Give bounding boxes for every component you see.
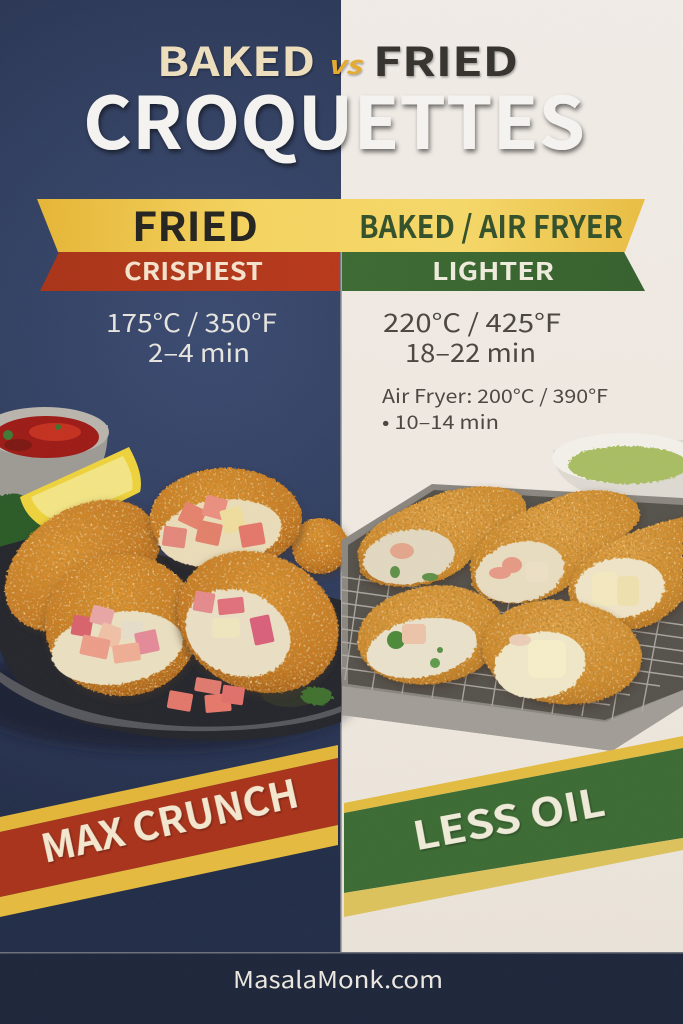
air fryer note: Air Fryer: 200°C / 390°F	[382, 382, 608, 409]
baking tray	[342, 484, 683, 751]
fried cooking specs	[106, 304, 277, 370]
herb garnish	[301, 687, 333, 705]
banner body green	[344, 748, 683, 893]
food photo: baked croquettes on tray	[342, 433, 683, 751]
croquette: front right	[477, 592, 647, 712]
title	[83, 30, 585, 170]
baked cooking specs	[383, 304, 561, 370]
banner text: MAX CRUNCH	[35, 763, 303, 875]
banner stripe bottom gold	[0, 825, 338, 917]
ribbon: crispiest red	[40, 252, 340, 291]
footer bar	[0, 952, 683, 1024]
air fryer note	[382, 382, 608, 435]
ham pieces on plate	[167, 677, 245, 713]
label: baked air fryer: BAKED / AIR FRYER	[359, 202, 623, 247]
banner stripe top gold	[344, 736, 683, 813]
banner stripe bottom gold	[344, 838, 683, 917]
banner body red	[0, 758, 338, 897]
air fryer note: • 10–14 min	[382, 408, 499, 435]
fried cooking specs: 2–4 min	[148, 334, 250, 370]
croquette: back middle	[470, 490, 640, 611]
footer website: MasalaMonk.com	[233, 961, 443, 995]
croquette: lower left	[45, 554, 199, 696]
icon: guacamole bowl	[552, 433, 683, 502]
plate	[0, 530, 356, 750]
banner stripe top gold	[0, 745, 338, 832]
title line: croquettes: CROQUETTES	[83, 65, 585, 170]
banner: max crunch	[0, 745, 338, 917]
croquette: lower right	[154, 525, 362, 719]
title line: baked vs fried: BAKED	[157, 30, 315, 88]
banner: less oil	[344, 736, 683, 917]
icon: herbs	[0, 494, 46, 550]
ribbon: lighter green	[342, 252, 645, 291]
croquette: back right	[292, 518, 348, 574]
baked cooking specs: 18–22 min	[405, 334, 536, 370]
baked cooking specs: 220°C / 425°F	[383, 304, 561, 340]
croquette: back right	[568, 517, 683, 629]
label: crispiest: CRISPIEST	[124, 252, 263, 287]
title line: baked vs fried	[157, 30, 518, 88]
centre divider	[340, 199, 342, 953]
food photo: fried croquettes on plate	[0, 407, 362, 750]
title line: baked vs fried: FRIED	[373, 30, 518, 88]
ribbon: gold header	[37, 199, 645, 252]
banner text: LESS OIL	[408, 772, 609, 862]
icon: lemon wedge	[20, 447, 141, 532]
croquette: front left	[351, 576, 511, 694]
title line: baked vs fried: vs	[327, 46, 364, 82]
label: fried: FRIED	[132, 195, 258, 253]
background: navy fried side	[0, 0, 341, 1024]
wire rack	[342, 575, 683, 720]
header ribbons	[37, 195, 645, 291]
label: lighter: LIGHTER	[432, 252, 554, 287]
fried cooking specs: 175°C / 350°F	[106, 304, 277, 340]
croquette: top centre	[150, 468, 302, 574]
icon: salsa bowl	[0, 407, 109, 498]
croquette: back left	[358, 487, 526, 590]
croquette: back left	[0, 472, 183, 660]
background: cream baked side	[341, 0, 683, 1024]
